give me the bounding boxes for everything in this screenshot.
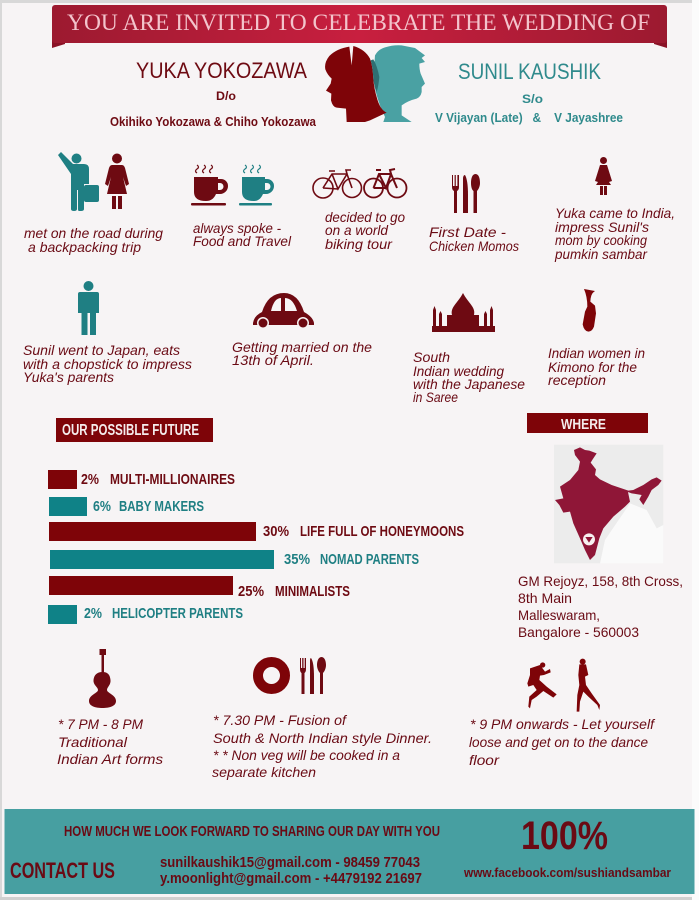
caption: biking tour: biking tour [325, 236, 393, 252]
contact details [160, 854, 422, 887]
caption: Indian women in Kimono: Indian women in [548, 345, 645, 361]
icon: racing bicycle [313, 170, 362, 198]
caption: Sunil went to Japan: Sunil went to Japan, eats [23, 342, 180, 358]
bride name block: Okihiko Yokozawa & Chiho Yokozawa [110, 114, 317, 129]
caption: always spoke: Food and Travel [193, 233, 292, 249]
bar: helicopter parents: HELICOPTER PARENTS [112, 605, 243, 622]
caption: always spoke [193, 220, 292, 249]
icon: dancing man [527, 662, 557, 708]
caption: first date [429, 224, 519, 254]
caption: 9 PM dancing: loose and get on to the dance [469, 734, 648, 750]
caption: Yuka came to India: Yuka came to India, [555, 205, 675, 221]
caption: South Indian wedding: in Saree [413, 389, 458, 405]
caption: 9 PM dancing: floor [469, 752, 500, 768]
address: Malleswaram, [518, 607, 600, 623]
icon: traveller man with suitcase [58, 152, 99, 211]
caption: Indian women in Kimono: Kimono for the [548, 359, 637, 375]
caption: Sunil went to Japan [23, 342, 192, 385]
caption: getting married: 13th of April. [232, 352, 314, 368]
bar: life full of honeymoons: 30% [263, 523, 289, 540]
heading: our possible future: OUR POSSIBLE FUTURE [62, 422, 199, 439]
bar: baby makers: 6% [93, 498, 111, 515]
icon: car [253, 293, 314, 329]
icon: fork knife spoon [452, 174, 480, 213]
big percentage: 100% [521, 814, 608, 858]
bar: multi-millionaires: 2% [81, 471, 99, 488]
bar: nomad parents: 35% [284, 551, 310, 568]
title: YOU ARE INVITED TO CELEBRATE THE WEDDING OF [67, 10, 650, 35]
bar: baby makers: BABY MAKERS [119, 498, 204, 515]
caption: Sunil went to Japan: Yuka's parents [23, 369, 114, 385]
caption: 7.30 PM dinner: South & North Indian style Dinner. [213, 730, 432, 746]
bride name block: YUKA YOKOZAWA [136, 58, 307, 83]
map: India with Bangalore pin [554, 445, 663, 563]
icon: maroon coffee cup [191, 165, 228, 206]
heading: where: WHERE [561, 416, 606, 433]
address: 8th Main [518, 590, 572, 606]
groom name block [435, 59, 623, 125]
icon: standing man [78, 281, 99, 335]
caption: 7 PM art forms [57, 716, 163, 767]
caption: getting married [232, 339, 372, 368]
bar: nomad parents: NOMAD PARENTS [320, 551, 419, 568]
caption: Yuka came to India: pumkin sambar [554, 246, 648, 262]
bar: life full of honeymoons: LIFE FULL OF HONEYMOONS [300, 523, 464, 540]
address [518, 573, 683, 640]
caption: 7.30 PM dinner: separate kitchen [212, 764, 316, 780]
bar: minimalists [49, 576, 350, 600]
bar: baby makers [49, 497, 204, 516]
couple silhouette heads [325, 45, 425, 122]
footer headline: HOW MUCH WE LOOK FORWARD TO SHARING OUR DAY WITH YOU [64, 823, 440, 840]
heading: where [527, 413, 648, 433]
caption: 7.30 PM dinner: * * Non veg will be cooked in a [213, 747, 400, 763]
icon: small woman [595, 157, 612, 195]
contact us label: CONTACT US [10, 858, 115, 883]
icon: teal coffee cup [239, 165, 274, 206]
address: Bangalore - 560003 [518, 624, 639, 640]
icon: tuba [583, 289, 596, 332]
caption: 7 PM art forms: * 7 PM - 8 PM [58, 716, 143, 732]
bar chart: possible future [48, 470, 464, 624]
title banner [52, 5, 667, 48]
caption: met on the road [24, 225, 163, 255]
contact details: y.moonlight@gmail.com - +4479192 21697 [160, 870, 422, 887]
groom name block: S/o [522, 92, 543, 106]
caption: South Indian wedding: South [413, 349, 450, 365]
caption: 7 PM art forms: Traditional [58, 734, 128, 750]
bar: nomad parents [50, 550, 419, 569]
contact details: sunilkaushik15@gmail.com - 98459 77043 [160, 854, 420, 871]
caption: biking tour [325, 209, 405, 252]
caption: South Indian wedding: Indian wedding [413, 363, 504, 379]
bar: multi-millionaires [48, 470, 235, 489]
caption: getting married: Getting married on the [232, 339, 372, 355]
caption: 9 PM dancing [469, 716, 656, 768]
icon: dancing woman [577, 659, 600, 712]
icon: city bicycle [364, 169, 406, 198]
caption: met on the road: met on the road during [24, 225, 163, 241]
caption: Indian women in Kimono [548, 345, 645, 388]
caption: biking tour: decided to go [325, 209, 405, 225]
caption: South Indian wedding [413, 349, 525, 405]
bride name block: D/o [216, 89, 236, 103]
caption: first date: Chicken Momos [429, 238, 519, 254]
address: GM Rejoyz, 158, 8th Cross, [518, 573, 683, 589]
caption: Yuka came to India: impress Sunil's [555, 219, 649, 235]
caption: Indian women in Kimono: reception [548, 372, 606, 388]
bar: multi-millionaires: MULTI-MILLIONAIRES [110, 471, 235, 488]
caption: 7.30 PM dinner [212, 712, 432, 780]
caption: Yuka came to India [554, 205, 675, 262]
bar: helicopter parents: 2% [84, 605, 102, 622]
caption: met on the road: a backpacking trip [28, 239, 141, 255]
facebook url: www.facebook.com/sushiandsambar [463, 865, 671, 880]
bar: helicopter parents [48, 605, 243, 624]
bar: minimalists: MINIMALISTS [275, 583, 350, 600]
bar: life full of honeymoons [49, 522, 464, 541]
caption: Yuka came to India: mom by cooking [555, 232, 647, 248]
icon: Taj Mahal [432, 293, 495, 332]
caption: first date: First Date - [429, 224, 506, 240]
icon: violin [89, 649, 116, 708]
caption: South Indian wedding: with the Japanese [413, 376, 525, 392]
icon: plate and cutlery [258, 657, 326, 694]
caption: 7.30 PM dinner: * 7.30 PM - Fusion of [213, 712, 348, 728]
groom name block: V Vijayan (Late) & V Jayashree [435, 110, 623, 125]
heading: our possible future [56, 418, 213, 442]
caption: Sunil went to Japan: with a chopstick to impress [23, 356, 192, 372]
caption: biking tour: on a world [325, 222, 389, 238]
bar: minimalists: 25% [238, 583, 264, 600]
caption: 9 PM dancing: * 9 PM onwards - Let yourself [470, 716, 656, 732]
caption: always spoke: always spoke - [193, 220, 281, 236]
panel: footer contact [4, 809, 694, 894]
caption: 7 PM art forms: Indian Art forms [57, 751, 163, 767]
groom name block: SUNIL KAUSHIK [458, 59, 601, 84]
icon: woman [105, 154, 129, 209]
bride name block [110, 58, 317, 129]
